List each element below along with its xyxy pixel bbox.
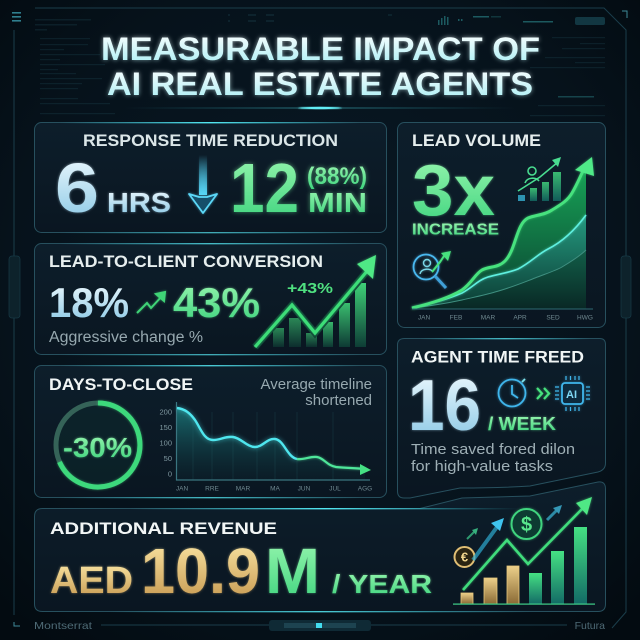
value: M / year: / YEAR bbox=[332, 569, 432, 599]
side rail handles bbox=[9, 256, 631, 318]
icon: euro coin bbox=[454, 547, 474, 567]
caption: time saved: for high-value tasks bbox=[411, 458, 553, 475]
donut: -30%: -30% bbox=[63, 432, 132, 463]
heading: lead volume: LEAD VOLUME bbox=[412, 132, 541, 150]
value: 3x increase: INCREASE bbox=[412, 222, 499, 238]
footer pager bbox=[269, 620, 371, 631]
donut: -30% bbox=[56, 403, 140, 487]
y axis labels: 100 bbox=[159, 438, 172, 448]
panel: lead-to-client conversion bbox=[34, 243, 386, 355]
x axis labels: JAN bbox=[176, 486, 188, 492]
value unit: / week: / WEEK bbox=[488, 414, 556, 434]
after value: 12 min (88%): MIN bbox=[308, 187, 367, 218]
chart: conversion growth bbox=[255, 255, 376, 347]
month labels: FEB bbox=[450, 314, 462, 322]
panel: days-to-close bbox=[34, 365, 386, 498]
after value: 12 min (88%) bbox=[230, 149, 367, 227]
caption: time saved bbox=[411, 441, 575, 475]
icon: growth bars with person bbox=[518, 157, 561, 201]
panel: response time reduction bbox=[34, 122, 386, 233]
x axis labels: MA bbox=[270, 486, 281, 492]
title bbox=[101, 31, 540, 102]
arrow: down bbox=[189, 155, 217, 213]
heading: days-to-close: DAYS-TO-CLOSE bbox=[49, 376, 193, 394]
x axis labels: AGG bbox=[358, 486, 372, 492]
growth arrows bbox=[467, 505, 562, 560]
icon: AI chip bbox=[555, 376, 590, 411]
x axis labels bbox=[176, 486, 372, 492]
y axis labels: 150 bbox=[159, 423, 172, 432]
value: AED 10.9: 10.9 bbox=[141, 535, 260, 607]
HUD status widgets bbox=[438, 16, 605, 98]
heading: response time reduction: RESPONSE TIME REDUCTION bbox=[83, 132, 338, 150]
note: average timeline: Average timeline bbox=[261, 376, 372, 393]
x axis labels: JUN bbox=[298, 486, 311, 492]
before value: 6 hrs: HRS bbox=[107, 187, 171, 218]
panel: lead volume bbox=[398, 122, 606, 328]
note: average timeline: shortened bbox=[305, 392, 372, 409]
icon: dollar coin bbox=[512, 509, 542, 539]
chart: lead volume area bbox=[412, 157, 594, 322]
value: 3x increase: 3x bbox=[412, 151, 495, 231]
icon: AI chip: AI bbox=[566, 389, 577, 401]
month labels: SED bbox=[546, 314, 560, 322]
before value: 6 hrs bbox=[55, 149, 171, 227]
x axis labels: RRE bbox=[205, 486, 220, 492]
value: 18%: 18% bbox=[49, 279, 129, 326]
footer label: Futura: Futura bbox=[575, 620, 605, 632]
icon: menu bbox=[12, 12, 21, 22]
heading: agent time freed: AGENT TIME FREED bbox=[411, 348, 584, 366]
chart: days-to-close line bbox=[159, 402, 372, 492]
x axis labels: JUL bbox=[329, 486, 341, 492]
value: 43%: 43% bbox=[173, 279, 260, 326]
before value: 6 hrs: 6 bbox=[55, 149, 99, 227]
y axis labels: 0 bbox=[168, 470, 172, 478]
title: AI REAL ESTATE AGENTS bbox=[107, 66, 533, 102]
icon: dollar coin: $ bbox=[521, 514, 532, 536]
x axis labels: MAR bbox=[236, 486, 251, 492]
month labels: JAN bbox=[418, 314, 430, 322]
background HUD details bbox=[35, 14, 605, 116]
icon: lead search bbox=[414, 251, 451, 288]
label: +43%: +43% bbox=[287, 280, 333, 297]
after value: 12 min (88%): 12 bbox=[230, 149, 299, 227]
value: AED 10.9 bbox=[50, 535, 260, 607]
panel: additional revenue bbox=[34, 482, 606, 612]
value: M / year: M bbox=[265, 535, 320, 607]
icon: clock bbox=[498, 379, 526, 406]
title: MEASURABLE IMPACT OF bbox=[101, 31, 540, 67]
chart: revenue growth bbox=[453, 497, 595, 605]
y axis labels bbox=[159, 408, 172, 478]
month labels: HWG bbox=[577, 314, 593, 322]
value: AED 10.9: AED bbox=[50, 560, 133, 602]
y axis labels: 50 bbox=[164, 454, 172, 463]
panel: agent time freed bbox=[398, 338, 606, 498]
title divider glow bbox=[125, 107, 515, 109]
value: M / year bbox=[265, 535, 432, 607]
month labels: APR bbox=[513, 314, 527, 322]
heading: conversion: LEAD-TO-CLIENT CONVERSION bbox=[49, 253, 323, 271]
month labels: MAR bbox=[481, 314, 496, 322]
icon: small trend arrow bbox=[137, 292, 165, 313]
y axis labels: 200 bbox=[159, 408, 172, 416]
footer label: Montserrat: Montserrat bbox=[34, 620, 92, 632]
note: average timeline bbox=[261, 376, 372, 409]
caption: aggressive change: Aggressive change % bbox=[49, 329, 203, 346]
icon: chevrons bbox=[537, 388, 549, 399]
heading: additional revenue: ADDITIONAL REVENUE bbox=[50, 520, 277, 538]
icon: euro coin: € bbox=[461, 550, 468, 564]
month labels bbox=[418, 314, 593, 322]
value: 16: 16 bbox=[408, 366, 481, 446]
after value: 12 min (88%): (88%) bbox=[307, 163, 367, 190]
caption: time saved: Time saved fored dilon bbox=[411, 441, 575, 458]
